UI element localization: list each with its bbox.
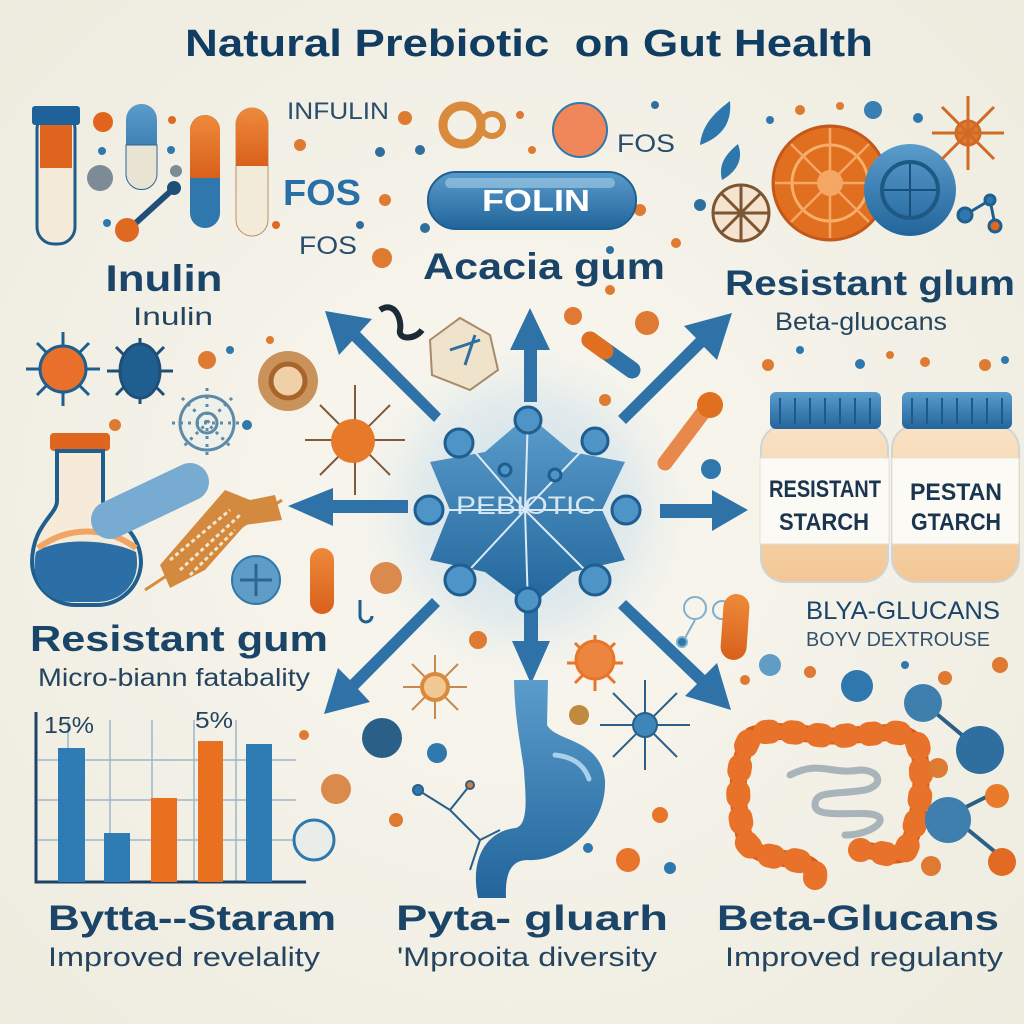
icon: colon [738,731,921,878]
icon: dumbbell molecule [115,181,181,242]
molecule near jars [677,597,731,647]
subheading: improved revelality: Improved revelality [48,942,321,972]
icon: blue cell [232,556,280,604]
subheading: beta-glucans: Beta-gluocans [775,308,947,336]
icon: orange capsule small [310,548,402,622]
icon: acacia fragment [380,307,498,390]
icon: gray virus [172,388,242,458]
arrow: left [288,488,408,526]
label: fos right: FOS [617,130,675,158]
bar value 2: 5% [195,707,233,733]
label: blya-glucans: BLYA-GLUCANS [806,597,1000,625]
heading: resistant gum: Resistant gum [30,618,328,659]
icon: stomach [476,680,605,898]
subheading: microbiota: Micro-biann fatabality [38,664,311,692]
heading: bytta-staram: Bytta--Staram [48,899,336,938]
capsule: folin [428,172,636,229]
heading: inulin: Inulin [106,258,222,299]
icon: orange star microbe [305,385,405,495]
label: prebiotic: PEBIOTIC [456,492,596,520]
arrow: down-left [324,598,440,714]
jar-top particles [762,346,1009,371]
arrow: up [510,308,550,402]
small particles [87,112,280,229]
icon: blue leaves [700,101,740,180]
jar: pestan gtarch [892,392,1019,582]
panel: inulin capsules [32,104,280,244]
icon: orange ring fos [443,103,607,157]
label: fos blue: FOS [283,172,361,213]
icon: branched molecule [413,781,500,870]
icon: orange sun [567,635,623,691]
heading: beta-glucans: Beta-Glucans [717,899,999,938]
icon: blue bacterium [107,338,173,404]
icon: orange capsule right [720,593,750,661]
panel: bottom middle microbes [294,631,690,874]
icon: capsule pin [564,285,659,370]
icon: flask [32,433,141,605]
subheading: microbiota diversity: 'Mprooita diversity [397,942,658,972]
label: body dextrose: BOYV DEXTROUSE [806,629,990,651]
subheading: inulin: Inulin [133,303,213,331]
panel: left microbes [26,332,405,495]
icon: wheel [713,185,769,241]
icon: capsule orange and blue [190,115,220,228]
icon: orange swab [599,392,723,479]
icon: orange microbe [26,332,100,406]
icon: brown organism [258,351,318,411]
right scattered microbes [740,654,1008,702]
icon: tan spore [403,655,467,719]
arrow: down [512,606,550,684]
arrow: right [660,490,748,531]
scattered top dots [294,111,681,268]
particles [294,631,676,874]
heading: acacia gum: Acacia gum [423,246,665,287]
central prebiotic network [415,407,640,612]
icon: blue disc [864,144,956,236]
label: inulin top: INFULIN [287,98,389,125]
arrows [288,308,748,714]
arrow: up-right [618,313,732,424]
bar value 1: 15% [44,712,94,738]
icon: root bundle [145,490,282,590]
particles [766,101,923,124]
icon: capsule blue [126,104,157,190]
jar: pestan gtarch: GTARCH [911,509,1001,536]
jar: resistant starch [760,392,889,582]
panel: top right botanicals [700,96,1004,241]
jar: resistant starch: RESISTANT [769,476,881,503]
arrow: up-left [325,311,441,422]
capsule: folin: FOLIN [482,183,590,218]
icon: spore star [932,96,1004,170]
icon: blue star molecule [600,680,690,770]
icon: small molecule [958,195,1001,232]
arrow: down-right [618,600,731,710]
icon: right molecules [904,684,1016,876]
label: fos small: FOS [299,232,357,260]
icon: test tube [32,106,80,244]
jar: pestan gtarch: PESTAN [910,479,1002,506]
particles [109,336,274,431]
center glow [340,325,710,695]
heading: resistant glum: Resistant glum [725,264,1015,303]
title: Natural Prebiotic on Gut Health [185,23,873,65]
subheading: improved regularity: Improved regulanty [725,942,1004,972]
icon: capsule orange and cream [236,108,268,236]
icon: orange citrus [773,126,887,240]
icon: blue tube [110,482,190,520]
jar: resistant starch: STARCH [779,509,869,536]
heading: pyta-gluarh: Pyta- gluarh [396,899,668,938]
bar chart [36,707,306,882]
